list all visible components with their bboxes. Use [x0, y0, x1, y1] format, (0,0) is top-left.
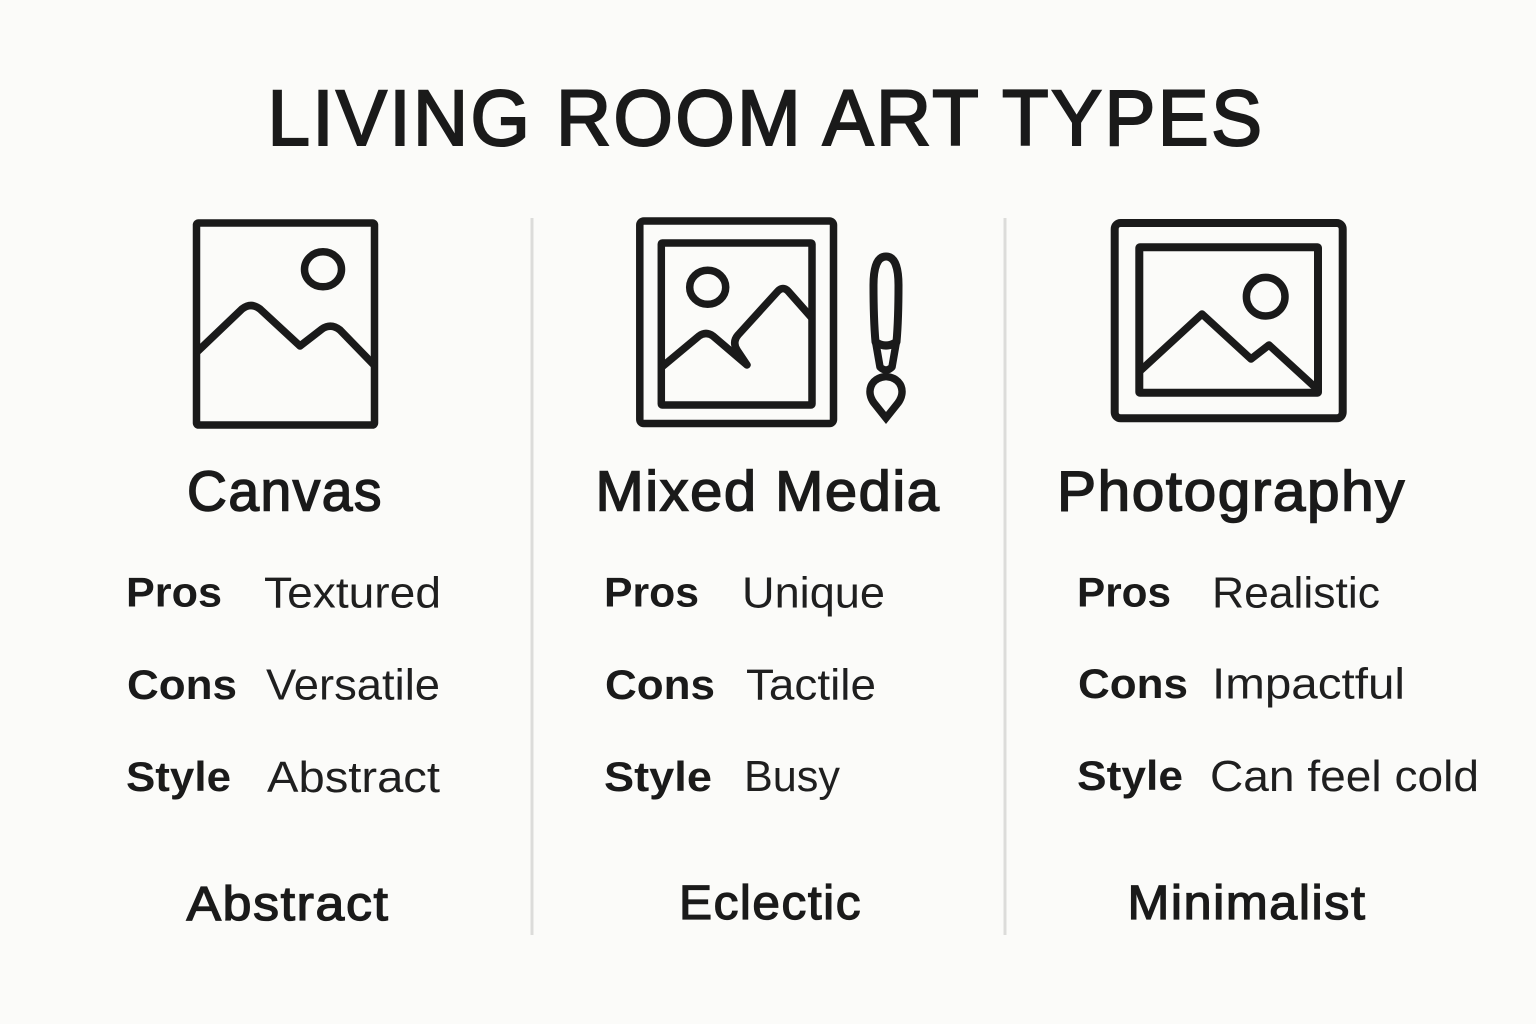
- photography heading: Photography: [1057, 460, 1406, 524]
- mixed media rows: Tactile: [746, 662, 876, 710]
- canvas rows: Style: [126, 753, 231, 800]
- photography rows: [1077, 568, 1479, 801]
- title: LIVING ROOM ART TYPES: [268, 73, 1264, 162]
- canvas heading: Canvas: [187, 460, 383, 524]
- panel: mixed media: [596, 221, 940, 930]
- canvas rows: Textured: [264, 570, 441, 618]
- canvas rows: Versatile: [266, 662, 440, 710]
- panel: photography: [1057, 223, 1479, 930]
- mixed media rows: Cons: [605, 661, 715, 708]
- mixed media rows: Pros: [604, 568, 699, 616]
- photography rows: Style: [1077, 752, 1183, 799]
- icon: canvas picture: [196, 223, 374, 425]
- photography rows: Cons: [1078, 660, 1188, 707]
- mixed media rows: Style: [604, 753, 712, 800]
- photography footer: Minimalist: [1128, 877, 1366, 930]
- canvas rows: [126, 568, 441, 802]
- mixed media rows: [604, 568, 885, 801]
- canvas rows: Cons: [127, 661, 237, 708]
- mixed media footer: Eclectic: [679, 877, 862, 930]
- mixed media rows: Unique: [742, 570, 885, 618]
- panel: canvas: [126, 223, 441, 931]
- canvas footer: Abstract: [186, 878, 390, 931]
- canvas rows: Pros: [126, 568, 222, 616]
- photography rows: Realistic: [1212, 570, 1380, 618]
- photography rows: Pros: [1077, 568, 1171, 616]
- mixed media heading: Mixed Media: [596, 460, 940, 524]
- mixed media rows: Busy: [744, 753, 840, 801]
- icon: framed photograph: [1115, 223, 1343, 418]
- photography rows: Can feel cold: [1210, 753, 1479, 801]
- photography rows: Impactful: [1212, 660, 1405, 708]
- icon: framed picture with paintbrush: [640, 221, 902, 424]
- canvas rows: Abstract: [267, 754, 440, 802]
